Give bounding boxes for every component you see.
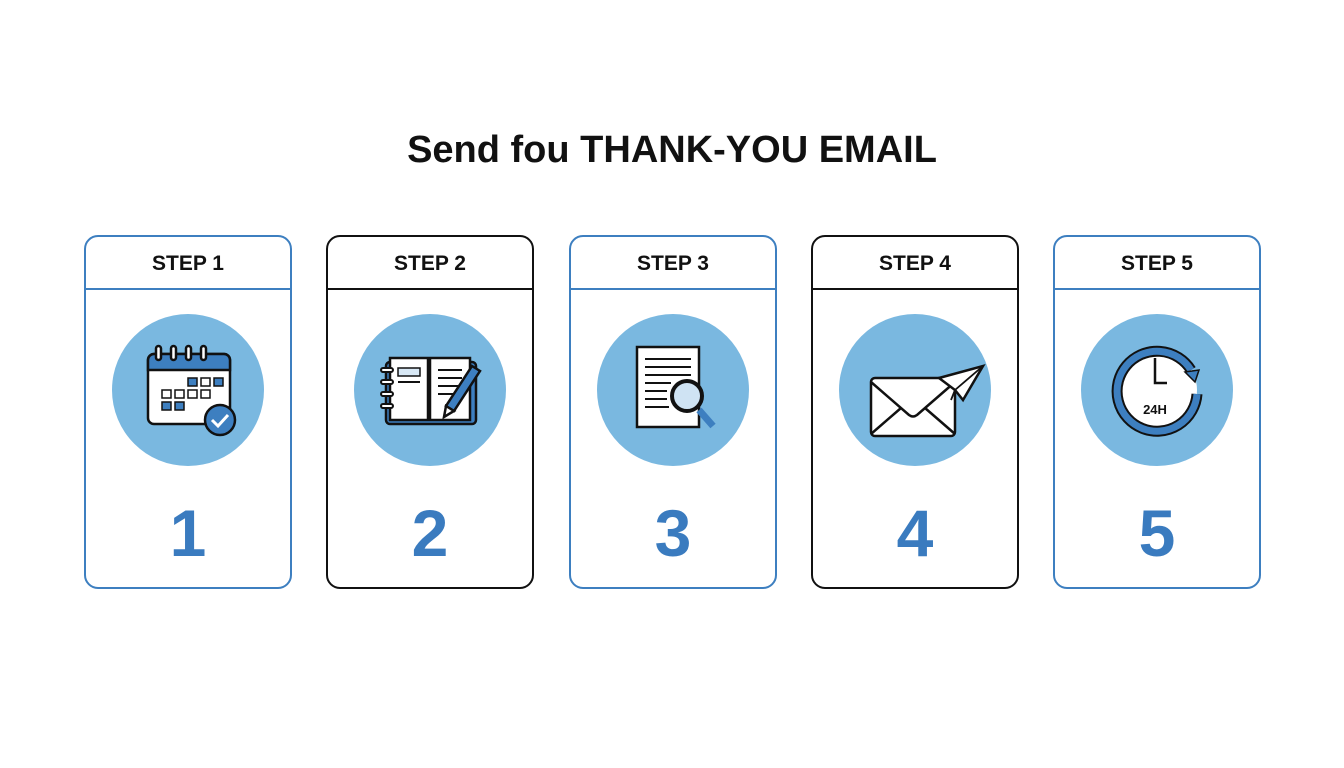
heading: step 4: STEP 4 bbox=[879, 252, 951, 275]
heading: step 3 bbox=[571, 237, 775, 290]
heading: step 2: STEP 2 bbox=[394, 252, 466, 275]
icon: 24h clock bbox=[1081, 314, 1233, 466]
icon: calendar with check bbox=[112, 314, 264, 466]
panel: step 5 bbox=[1053, 235, 1261, 589]
heading: step 4 bbox=[813, 237, 1017, 290]
icon: document with magnifier bbox=[597, 314, 749, 466]
number 5: 5 bbox=[1139, 496, 1175, 570]
number 4: 4 bbox=[897, 496, 933, 570]
number 1: 1 bbox=[170, 496, 206, 570]
panel: step 2 bbox=[326, 235, 534, 589]
panel: step 3 bbox=[569, 235, 777, 589]
heading: step 5: STEP 5 bbox=[1121, 252, 1193, 275]
icon: envelope with paper plane bbox=[839, 314, 991, 466]
heading: step 1 bbox=[86, 237, 290, 290]
heading: step 2 bbox=[328, 237, 532, 290]
heading: step 1: STEP 1 bbox=[152, 252, 224, 275]
icon: 24h clock: 24H bbox=[1143, 402, 1167, 417]
title: Send fou THANK-YOU EMAIL bbox=[407, 129, 937, 171]
number 3: 3 bbox=[655, 496, 691, 570]
icon: notebook with pen bbox=[354, 314, 506, 466]
number 2: 2 bbox=[412, 496, 448, 570]
heading: step 5 bbox=[1055, 237, 1259, 290]
panel: step 1 bbox=[84, 235, 292, 589]
heading: step 3: STEP 3 bbox=[637, 252, 709, 275]
panel: step 4 bbox=[811, 235, 1019, 589]
